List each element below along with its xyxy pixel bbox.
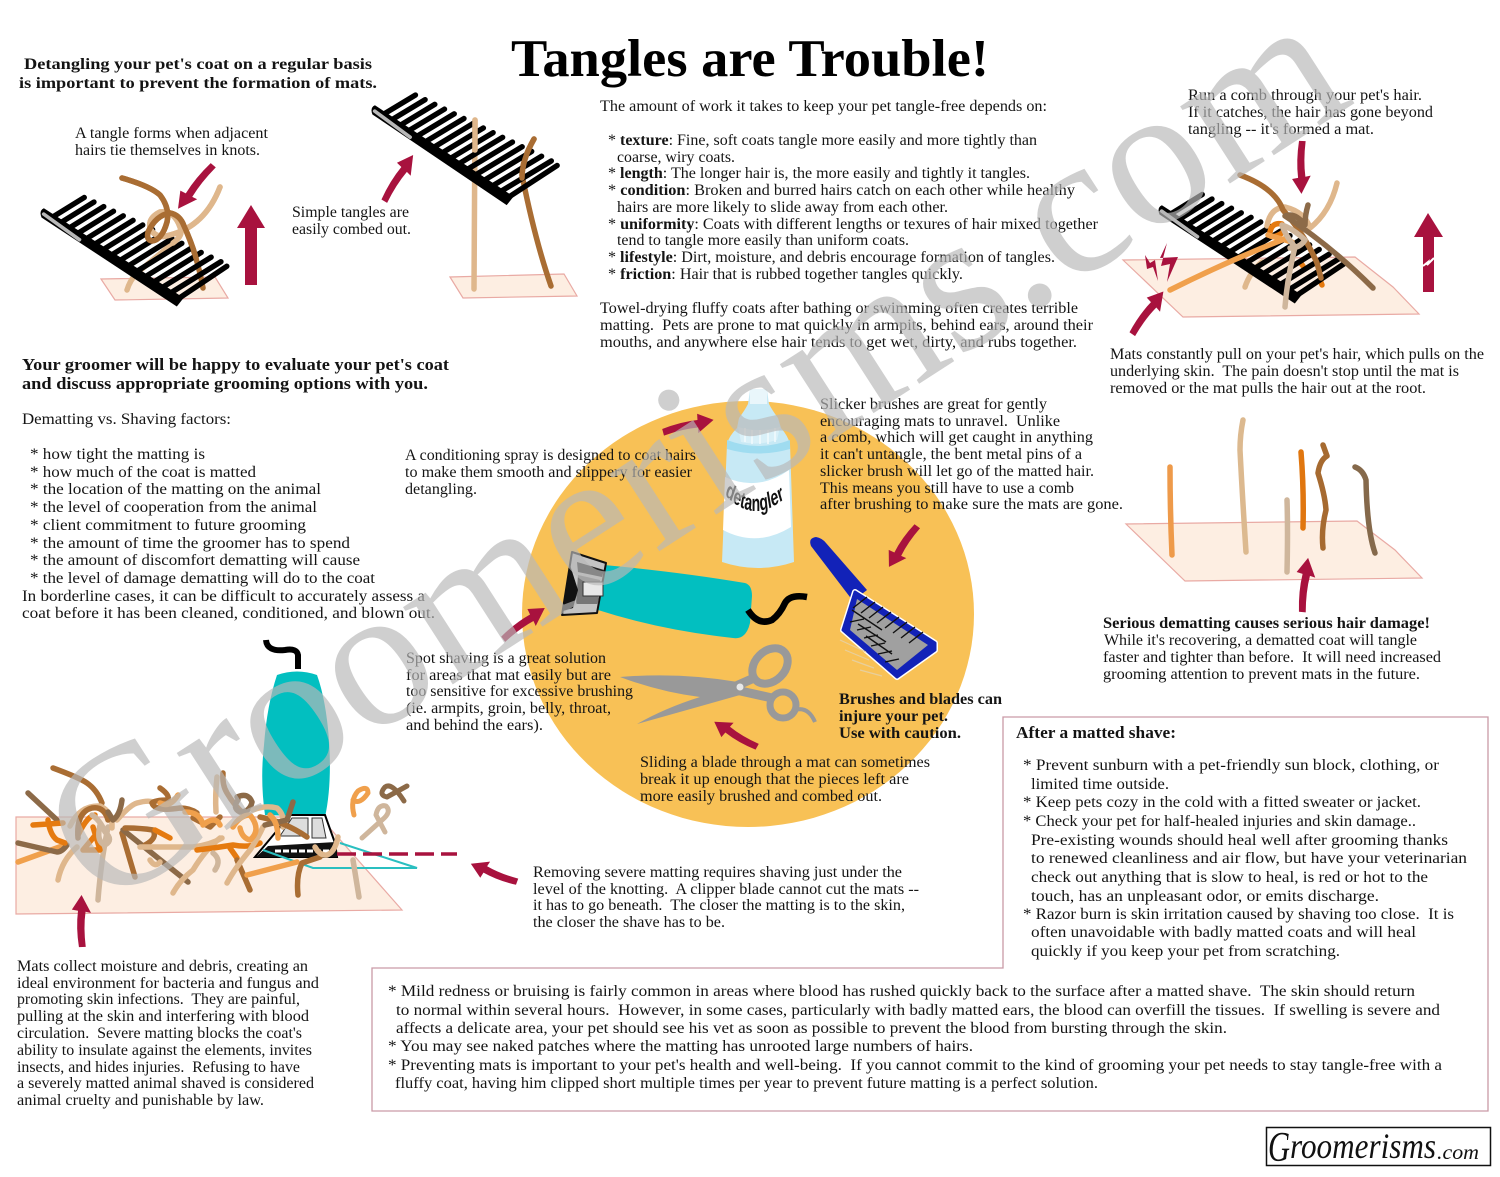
text: mats collect moisture: circulation. Severe matting blocks the coat's <box>17 1025 302 1042</box>
text: towel drying: mouths, and anywhere else hair tends to get wet, dirty, and rubs together. <box>600 334 1077 351</box>
text: sliding a blade: more easily brushed and combed out. <box>640 788 882 805</box>
text: conditioning spray <box>405 447 696 498</box>
cut hair pieces <box>353 786 407 838</box>
list: bruising and prevention: fluffy coat, having him clipped short multiple times per year to prevent future matting is a perfect solution. <box>395 1075 1098 1092</box>
heading: detangling: is important to prevent the formation of mats. <box>19 75 377 92</box>
text: sliding a blade <box>640 754 930 805</box>
text: run a comb: Run a comb through your pet's hair. <box>1188 87 1422 104</box>
text: dematting vs shaving: In borderline cases, it can be difficult to accurately assess a <box>22 588 425 605</box>
list: aftercare: limited time outside. <box>1031 776 1169 793</box>
text: mats collect moisture: pulling at the skin and interfering with blood <box>17 1008 309 1025</box>
list: bruising and prevention: * You may see naked patches where the matting has unrooted large numbers of hairs. <box>388 1038 973 1055</box>
list: aftercare: * Keep pets cozy in the cold with a fitted sweater or jacket. <box>1023 794 1421 811</box>
list: factors: * the location of the matting on the animal <box>30 481 322 498</box>
callout: brushes and blades: injure your pet. <box>839 708 948 725</box>
text: mats constantly pull: underlying skin. The pain doesn't stop until the mat is <box>1110 363 1459 380</box>
logo: groomerisms.com: G <box>1268 1125 1290 1171</box>
arrow: to knot <box>170 159 221 214</box>
text: run a comb <box>1188 87 1433 138</box>
illustration: matted hair pulling skin <box>1123 161 1419 317</box>
list: factors: * the amount of time the groomer has to spend <box>30 535 350 552</box>
arrow: to brush <box>881 521 925 572</box>
arrow: to cut line <box>467 856 520 890</box>
text: slicker brushes: it can't untangle, the bent metal pins of a <box>820 446 1082 463</box>
clipper vertical <box>255 640 337 857</box>
callout: brushes and blades: Brushes and blades can <box>839 691 1002 708</box>
text: mats collect moisture: promoting skin infections. They are painful, <box>17 991 300 1008</box>
text: mats constantly pull <box>1110 346 1484 397</box>
text: sliding a blade: Sliding a blade through a mat can sometimes <box>640 754 930 771</box>
list: aftercare: Pre-existing wounds should heal well after grooming thanks <box>1031 832 1448 849</box>
list: coat factors <box>608 132 1099 283</box>
text: amount of work: The amount of work it takes to keep your pet tangle-free depends on: <box>600 98 1047 115</box>
text: simple tangles: Simple tangles are <box>292 204 409 221</box>
list: factors: * client commitment to future grooming <box>30 517 306 534</box>
list: coat factors: * texture: Fine, soft coats tangle more easily and more tightly than <box>608 132 1037 149</box>
text: mats collect moisture: insects, and hides injuries. Refusing to have <box>17 1059 300 1076</box>
list: aftercare: often unavoidable with badly matted coats and will heal <box>1031 924 1417 941</box>
arrow: to spray <box>661 410 716 442</box>
text: mats constantly pull: Mats constantly pull on your pet's hair, which pulls on the <box>1110 346 1484 363</box>
list: factors: * how tight the matting is <box>30 446 205 463</box>
heading: groomer evaluation: Your groomer will be happy to evaluate your pet's coat <box>22 355 449 374</box>
text: slicker brushes <box>820 396 1123 513</box>
list: bruising and prevention: to normal within several hours. However, in some cases, particularly with badly matted ears, the blood can overfill the tissues. If swelling is severe and <box>396 1002 1440 1019</box>
label: detangler: detangler <box>726 485 782 515</box>
list: coat factors: coarse, wiry coats. <box>617 149 735 166</box>
arrow: pull up <box>237 205 265 285</box>
heading: detangling <box>19 56 377 92</box>
callout: brushes and blades: Use with caution. <box>839 725 961 742</box>
text: mats collect moisture: a severely matted animal shaved is considered <box>17 1075 314 1092</box>
text: serious dematting: grooming attention to prevent mats in the future. <box>1103 666 1420 683</box>
list: bruising and prevention: * Mild redness or bruising is fairly common in areas where blood has rushed quickly back to the surface after a matted shave. The skin should return <box>388 983 1415 1000</box>
text: conditioning spray: A conditioning spray is designed to coat hairs <box>405 447 696 464</box>
text: tangle forms: hairs tie themselves in knots. <box>75 142 260 159</box>
list: coat factors: hairs are more likely to slide away from each other. <box>617 199 948 216</box>
text: mats collect moisture: ideal environment for bacteria and fungus and <box>17 975 319 992</box>
list: bruising and prevention: * Preventing mats is important to your pet's health and well-being. If you cannot commit to the kind of grooming your pet needs to stay tangle-free with a <box>388 1057 1442 1074</box>
list: aftercare: * Check your pet for half-healed injuries and skin damage.. <box>1023 813 1416 830</box>
text: dematting vs shaving: Dematting vs. Shaving factors: <box>22 411 231 428</box>
text: serious dematting <box>1103 615 1441 683</box>
text: conditioning spray: detangling. <box>405 481 477 498</box>
text: removing severe matting: level of the knotting. A clipper blade cannot cut the mats -- <box>533 881 919 898</box>
text: slicker brushes: encouraging mats to unravel. Unlike <box>820 413 1060 430</box>
callout: brushes and blades <box>839 691 1002 742</box>
list: coat factors: * condition: Broken and burred hairs catch on each other while healthy <box>608 182 1075 199</box>
text: slicker brushes: This means you still have to use a comb <box>820 480 1074 497</box>
arrow: to damaged hair <box>1293 557 1317 613</box>
text: serious dematting: While it's recovering, a dematted coat will tangle <box>1104 632 1417 649</box>
clipper blade wedge <box>263 843 417 868</box>
text: spot shaving: and behind the ears). <box>406 717 543 734</box>
text: towel drying: Towel-drying fluffy coats after bathing or swimming often creates terrible <box>600 300 1078 317</box>
text: removing severe matting: Removing severe matting requires shaving just under the <box>533 864 902 881</box>
text: mats collect moisture: ability to insulate against the elements, invites <box>17 1042 312 1059</box>
text: run a comb: tangling -- it's formed a mat. <box>1188 121 1374 138</box>
circle: tools background <box>522 401 974 827</box>
icon: scissors <box>620 641 815 724</box>
text: spot shaving: Spot shaving is a great solution <box>406 650 606 667</box>
text: removing severe matting: the closer the shave has to be. <box>533 914 725 931</box>
text: serious dematting: Serious dematting causes serious hair damage! <box>1103 615 1430 632</box>
list: coat factors: * friction: Hair that is rubbed together tangles quickly. <box>608 266 963 283</box>
text: conditioning spray: to make them smooth and slippery for easier <box>405 464 693 481</box>
list: coat factors: * uniformity: Coats with different lengths or texures of hair mixed together <box>608 216 1099 233</box>
text: removing severe matting: it has to go beneath. The closer the matting is to the skin, <box>533 897 905 914</box>
arrow: to skin under mats <box>71 895 92 947</box>
illustration: tangled hair in comb <box>38 164 228 317</box>
list: bruising and prevention: affects a delicate area, your pet should see his vet as soon as possible to prevent the blood from bursting through the skin. <box>396 1020 1227 1037</box>
text: dematting vs shaving: coat before it has been cleaned, conditioned, and blown out. <box>22 605 435 622</box>
list: aftercare: * Razor burn is skin irritation caused by shaving too close. It is <box>1023 906 1454 923</box>
text: mats collect moisture <box>17 958 319 1109</box>
text: amount of work <box>600 98 1099 351</box>
title: Tangles are Trouble! <box>511 30 989 88</box>
text: spot shaving: for areas that mat easily but are <box>406 667 611 684</box>
list: aftercare: check out anything that is slow to heal, is red or hot to the <box>1031 869 1428 886</box>
list: coat factors: * length: The longer hair is, the more easily and tightly it tangles. <box>608 165 1030 182</box>
text: run a comb: If it catches, the hair has gone beyond <box>1188 104 1433 121</box>
list: bruising and prevention <box>388 983 1442 1092</box>
logo: groomerisms.com <box>1266 1125 1490 1171</box>
list: factors: * the level of damage dematting will do to the coat <box>30 570 376 587</box>
text: towel drying <box>600 300 1094 351</box>
arrow: broken up arrow <box>1414 213 1443 292</box>
text: slicker brushes: a comb, which will get caught in anything <box>820 429 1093 446</box>
text: towel drying: matting. Pets are prone to mat quickly in armpits, behind ears, around their <box>600 317 1094 334</box>
heading: after a matted shave: After a matted shave: <box>1016 723 1176 742</box>
text: removing severe matting <box>533 864 919 931</box>
text: mats collect moisture: Mats collect moisture and debris, creating an <box>17 958 308 975</box>
text: mats collect moisture: animal cruelty and punishable by law. <box>17 1092 264 1109</box>
list: factors: * the amount of discomfort dematting will cause <box>30 552 360 569</box>
text: dematting vs shaving <box>22 411 435 622</box>
text: mats constantly pull: removed or the mat pulls the hair out at the root. <box>1110 380 1426 397</box>
text: slicker brushes: Slicker brushes are great for gently <box>820 396 1047 413</box>
list: aftercare <box>1023 757 1467 960</box>
icon: slicker brush <box>810 537 935 677</box>
arrow: to mat <box>1292 141 1312 194</box>
panel: after a matted shave <box>372 717 1488 1111</box>
text: tangle forms: A tangle forms when adjacent <box>75 125 269 142</box>
icon: clipper horizontal <box>562 552 807 638</box>
list: aftercare: quickly if you keep your pet from scratching. <box>1031 943 1340 960</box>
icon: pain lightning bolts <box>1145 243 1178 282</box>
text: slicker brushes: after brushing to make sure the mats are gone. <box>820 496 1123 513</box>
text: serious dematting: faster and tighter than before. It will need increased <box>1103 649 1441 666</box>
matted hair <box>18 768 359 900</box>
heading: detangling: Detangling your pet's coat on a regular basis <box>24 56 372 73</box>
text: sliding a blade: break it up enough that the pieces left are <box>640 771 909 788</box>
icon: detangler bottle <box>722 389 794 568</box>
list: factors: * how much of the coat is matted <box>30 464 256 481</box>
illustration: comb with straight hairs <box>369 62 577 298</box>
illustration: clean hairs after dematting <box>1126 420 1422 581</box>
heading: groomer evaluation <box>22 355 449 393</box>
list: aftercare: * Prevent sunburn with a pet-friendly sun block, clothing, or <box>1023 757 1440 774</box>
text: tangle forms <box>75 125 269 159</box>
logo: groomerisms.com: .com <box>1437 1140 1479 1164</box>
text: slicker brushes: slicker brush will let go of the matted hair. <box>820 463 1094 480</box>
arrow: to clipper <box>498 600 550 647</box>
label: detangler <box>726 485 782 515</box>
logo: groomerisms.com: roomerisms <box>1290 1126 1436 1166</box>
cut line <box>337 852 457 856</box>
text: simple tangles <box>292 204 411 238</box>
text: simple tangles: easily combed out. <box>292 221 411 238</box>
list: factors <box>30 446 376 587</box>
list: coat factors: tend to tangle more easily than uniform coats. <box>617 232 909 249</box>
illustration: shaving severe mats <box>16 640 457 914</box>
list: aftercare: touch, has an unpleasant odor, or emits discharge. <box>1031 888 1379 905</box>
list: coat factors: * lifestyle: Dirt, moisture, and debris encourage formation of tangles. <box>608 249 1055 266</box>
arrow: to skin <box>1125 286 1171 340</box>
heading: groomer evaluation: and discuss appropriate grooming options with you. <box>22 374 428 393</box>
arrow: to comb <box>377 150 421 206</box>
text: spot shaving <box>406 650 633 734</box>
arrow: to scissors <box>709 714 762 755</box>
text: spot shaving: too sensitive for excessive brushing <box>406 683 633 700</box>
text: spot shaving: (ie. armpits, groin, belly, throat, <box>406 700 611 717</box>
list: aftercare: to renewed cleanliness and air flow, but have your veterinarian <box>1031 850 1467 867</box>
list: factors: * the level of cooperation from the animal <box>30 499 318 516</box>
